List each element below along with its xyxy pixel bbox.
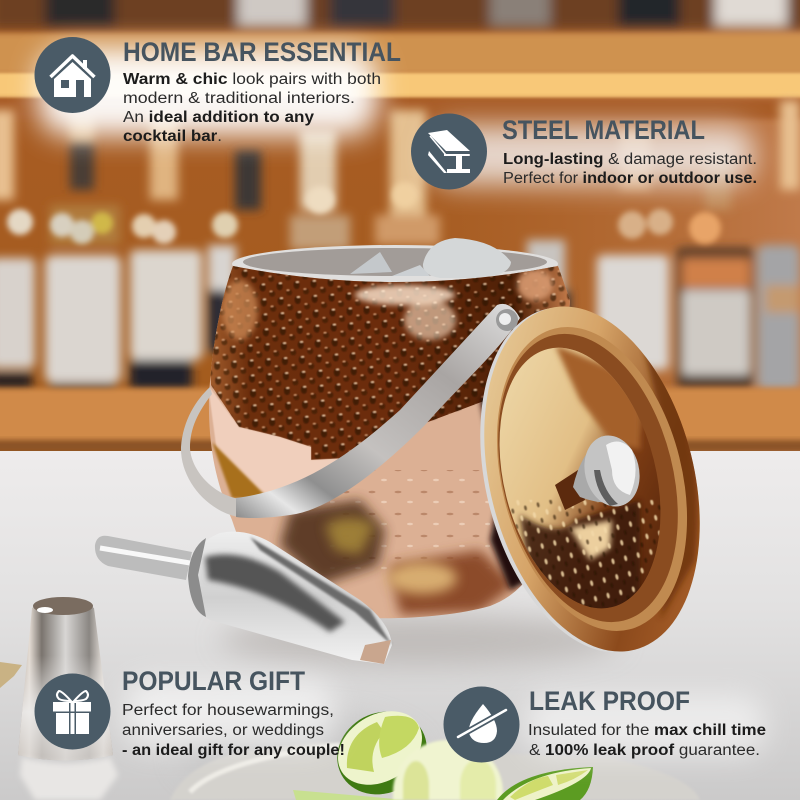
dark shadow by the lid xyxy=(476,392,522,594)
body text xyxy=(122,702,345,759)
body text xyxy=(503,151,757,187)
lid xyxy=(480,306,700,652)
glow xyxy=(38,48,378,136)
glow xyxy=(525,695,765,755)
bucket interior and rim xyxy=(232,245,558,283)
heading: HOME BAR ESSENTIAL xyxy=(123,37,401,67)
serving plate xyxy=(170,742,700,800)
body text: Long-lasting & damage resistant. xyxy=(503,151,757,168)
body text: Warm & chic look pairs with both xyxy=(123,71,381,88)
lime slices xyxy=(293,696,593,800)
ice cubes xyxy=(350,238,511,278)
lower body detail xyxy=(330,470,490,570)
icon: steel beam xyxy=(411,114,487,190)
bokeh highlights xyxy=(7,182,721,244)
icon: house xyxy=(34,37,110,113)
copper body xyxy=(208,266,570,618)
body text: Insulated for the max chill time xyxy=(528,722,766,739)
feature: popular gift xyxy=(34,666,345,759)
bottle labels and bases xyxy=(0,258,35,368)
body text: - an ideal gift for any couple! xyxy=(122,742,345,759)
bright hammered reflections xyxy=(222,269,553,340)
top shelf bottle bases xyxy=(0,0,800,30)
lower wooden shelf xyxy=(0,388,800,444)
heading: POPULAR GIFT xyxy=(122,666,305,696)
coaster edge xyxy=(0,662,22,688)
feature: steel material xyxy=(411,114,757,190)
lime right xyxy=(497,767,593,800)
handle rivet xyxy=(496,309,518,331)
glow xyxy=(430,125,755,185)
body text: modern & traditional interiors. xyxy=(123,90,355,107)
body text xyxy=(528,722,766,759)
pale band under dark area xyxy=(210,386,340,493)
background: blurred bar shelves with bottles xyxy=(0,0,800,460)
shaker glass xyxy=(18,597,118,800)
upper shelf board xyxy=(0,33,800,75)
feature: leak proof xyxy=(444,686,766,762)
lid knob xyxy=(555,430,647,512)
bottles row xyxy=(0,100,800,392)
lime left xyxy=(323,696,441,800)
bright shelf light strip xyxy=(0,73,800,98)
table surface xyxy=(0,451,800,800)
lid hammered texture xyxy=(510,348,660,608)
feature: home bar essential xyxy=(34,37,401,145)
heading: LEAK PROOF xyxy=(529,686,690,716)
heading: STEEL MATERIAL xyxy=(502,115,705,145)
lime wedge lower left xyxy=(293,790,407,800)
icon: crossed water drop xyxy=(444,686,520,762)
ice bucket xyxy=(181,238,580,625)
body text: An ideal addition to any xyxy=(123,109,314,126)
dark hammered upper band xyxy=(205,260,570,460)
body text: cocktail bar . xyxy=(123,128,222,145)
ice scoop xyxy=(95,532,392,664)
body text: Perfect for indoor or outdoor use. xyxy=(503,170,757,187)
handle band xyxy=(181,304,520,518)
glow xyxy=(125,680,335,748)
lid right rim streak xyxy=(640,330,698,620)
body text: anniversaries, or weddings xyxy=(122,722,324,739)
body text: & 100% leak proof guarantee. xyxy=(529,742,760,759)
icon: gift box xyxy=(34,674,110,750)
lime center xyxy=(393,740,503,800)
body text: Perfect for housewarmings, xyxy=(122,702,334,719)
body text xyxy=(123,71,381,145)
